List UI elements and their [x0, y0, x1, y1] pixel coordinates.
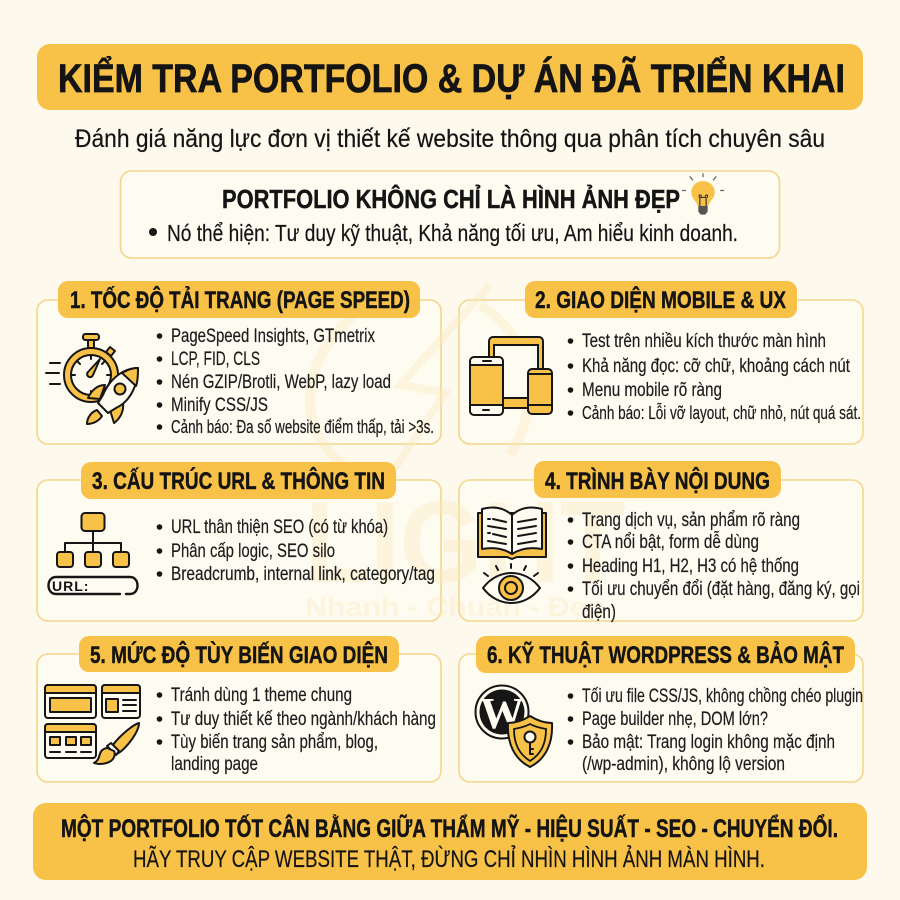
text block: section 5 bullets: landing page [171, 754, 258, 775]
text block: section 1 bullets [157, 326, 434, 437]
text block: section 6 bullets: (/wp-admin), không lộ version [582, 754, 785, 775]
watermark logo: Nhanh - Chuẩn - Đẹp [305, 592, 605, 622]
heading: section 3 [81, 462, 396, 499]
panel: 3 URL structure [37, 480, 441, 621]
heading: section 5 [79, 636, 399, 672]
text block: section 5 bullets: Tránh dùng 1 theme chung [171, 685, 352, 706]
icon: stopwatch and rocket [46, 334, 138, 424]
text block: section 3 bullets: URL thân thiện SEO (có từ khóa) [171, 517, 388, 538]
panel: 1 page speed [37, 300, 441, 444]
footer banner [33, 803, 867, 880]
heading: section 2: 2. GIAO DIỆN MOBILE & UX [535, 286, 787, 314]
text block: section 1 bullets: Cảnh báo: Đa số website điểm thấp, tải >3s. [171, 417, 434, 437]
text block: section 4 bullets: Trang dịch vụ, sản phẩm rõ ràng [582, 510, 800, 531]
heading: section 2 [525, 281, 797, 318]
icon: WordPress logo and security shield: W [480, 689, 524, 738]
icon: WordPress logo and security shield [476, 686, 552, 767]
text block: section 3 bullets: Breadcrumb, internal link, category/tag [171, 564, 435, 585]
watermark logo [305, 285, 625, 622]
heading: section 5: 5. MỨC ĐỘ TÙY BIẾN GIAO DIỆN [90, 641, 388, 669]
panel: portfolio intro: PORTFOLIO KHÔNG CHỈ LÀ HÌNH ẢNH ĐẸP [222, 184, 680, 214]
heading: section 1: 1. TỐC ĐỘ TẢI TRANG (PAGE SPEED) [70, 285, 410, 314]
text block: section 4 bullets [568, 510, 860, 623]
text block: section 2 bullets [568, 331, 861, 423]
text block: section 3 bullets: Phân cấp logic, SEO silo [171, 541, 335, 562]
icon: layouts and paintbrush [45, 685, 140, 764]
title banner [37, 44, 863, 110]
heading: section 4: 4. TRÌNH BÀY NỘI DUNG [545, 467, 770, 495]
text block: section 6 bullets: Bảo mật: Trang login không mặc định [582, 732, 835, 753]
text block: section 5 bullets: Tùy biến trang sản phẩm, blog, [171, 732, 378, 753]
text block: section 1 bullets: Nén GZIP/Brotli, WebP, lazy load [171, 372, 391, 393]
heading: section 3: 3. CẤU TRÚC URL & THÔNG TIN [92, 467, 385, 495]
text block: section 4 bullets: Heading H1, H2, H3 có hệ thống [582, 556, 799, 577]
text block: section 1 bullets: LCP, FID, CLS [171, 349, 260, 370]
text block: section 3 bullets [157, 517, 435, 585]
icon: open book and eye [478, 507, 546, 603]
subtitle: Đánh giá năng lực đơn vị thiết kế website thông qua phân tích chuyên sâu [75, 125, 825, 153]
text block: section 2 bullets: Menu mobile rõ ràng [582, 380, 722, 401]
heading: section 6 [476, 636, 855, 673]
panel: 5 theme customisation [37, 654, 441, 782]
text block: section 6 bullets [568, 686, 863, 775]
text block: section 4 bullets: điện) [582, 602, 616, 623]
watermark logo: LIGHT [305, 477, 625, 607]
text block: section 5 bullets [157, 685, 436, 775]
text block: section 1 bullets: PageSpeed Insights, GTmetrix [171, 326, 375, 347]
heading: section 4 [534, 461, 781, 498]
icon: site structure and URL bar [48, 513, 138, 594]
panel: 6 WordPress and security [459, 654, 863, 782]
panel: portfolio intro [120, 171, 780, 258]
icon: tablet and phones [470, 337, 552, 415]
panel: 2 mobile and UX [459, 300, 863, 444]
heading: section 1 [58, 281, 420, 318]
panel: portfolio intro: Nó thể hiện: Tư duy kỹ thuật, Khả năng tối ưu, Am hiểu kinh doanh. [167, 220, 738, 246]
text block: section 1 bullets: Minify CSS/JS [171, 395, 268, 416]
icon: light bulb [682, 173, 724, 215]
panel: 4 content [459, 480, 863, 621]
text block: section 5 bullets: Tư duy thiết kế theo ngành/khách hàng [171, 709, 436, 730]
text block: section 4 bullets: CTA nổi bật, form dễ dùng [582, 531, 759, 553]
text block: section 6 bullets: Page builder nhẹ, DOM lớn? [582, 709, 768, 730]
icon: site structure and URL bar: URL: [52, 578, 89, 594]
text block: section 2 bullets: Test trên nhiều kích thước màn hình [582, 331, 826, 352]
